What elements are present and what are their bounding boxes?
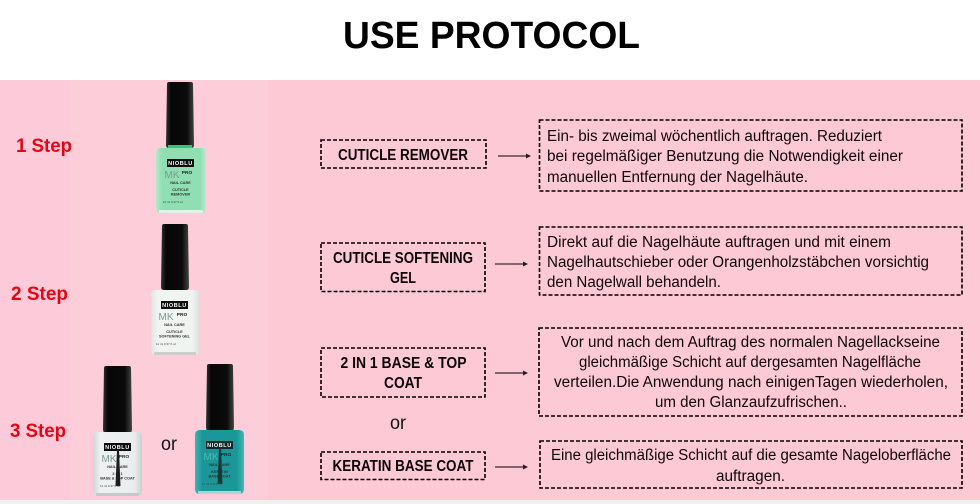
row: cuticle remover [321,120,962,191]
bottle: 2 in 1 base and top coat: 11 ml 0.37 fl.oz [100,484,121,488]
brush [116,450,120,486]
bottle: cuticle softening gel: PRO [177,312,187,318]
description box: base and top coat: Vor und nach dem Auftrag des normalen Nagellackseine [561,334,940,351]
description box: base and top coat [539,328,962,416]
description box: base and top coat: um den Glanzaufzufrischen.. [655,394,847,411]
row: keratin base coat [321,441,962,488]
bottle: cuticle softening gel: CUTICLE [166,330,183,334]
or between labels: or [390,413,407,434]
description box: base and top coat: verteilen.Die Anwendung nach einigenTagen wiederholen, [554,374,948,391]
bottle: 2 in 1 base and top coat: BASE & TOP COAT [100,476,135,480]
step labels [10,136,72,442]
bottle: cuticle softening gel: MK [158,312,174,323]
description box: base and top coat: gleichmäßige Schicht auf dergesamten Nagelfläche [579,354,921,371]
label box: keratin base coat: KERATIN BASE COAT [332,458,474,475]
description box: cuticle remover: Ein- bis zweimal wöchentlich auftragen. Reduziert [547,128,883,145]
bottle: cuticle remover: NAIL CARE [170,181,191,185]
arrow [495,464,528,470]
bottle: cuticle remover: NIOBLU [168,161,193,167]
arrow [498,154,531,158]
bottle: 2 in 1 base and top coat: NIOBLU [105,445,130,451]
bottle: keratin base coat: MK [204,452,219,463]
description box: cuticle softening gel: den Nagelwall behandeln. [547,274,721,291]
bottle: cuticle softening gel: NAIL CARE [164,323,185,327]
bottle: 2 in 1 base and top coat [93,366,142,496]
description box: cuticle remover: manuellen Entfernung der Nagelhäute. [547,169,808,186]
label box: 2 in 1 base and top coat: COAT [384,375,422,392]
bottle: cuticle remover: PRO [182,170,192,176]
label box: cuticle softening gel: GEL [390,270,416,287]
label box: cuticle softening gel [321,243,485,292]
label box: 2 in 1 base and top coat [321,348,485,397]
bottle: keratin base coat: BASE COAT [208,474,231,478]
bottle: keratin base coat: NAIL CARE [209,463,230,467]
title: USE PROTOCOL [343,15,640,57]
description box: keratin base coat [540,441,962,488]
description box: keratin base coat: Eine gleichmäßige Schicht auf die gesamte Nageloberfläche [551,447,951,464]
bottle: cuticle softening gel: 11 ml 0.37 fl.oz [156,342,177,346]
bottle: cuticle remover [156,82,206,213]
step 1 label: 1 Step [16,136,72,157]
bottle: cuticle remover: REMOVER [171,192,190,196]
bottle: cuticle remover: 11 ml 0.37 fl.oz [163,200,184,204]
label box: 2 in 1 base and top coat: 2 IN 1 BASE & TOP [340,355,466,372]
description box: cuticle softening gel: Direkt auf die Nagelhäute auftragen und mit einem [547,234,891,251]
label box: keratin base coat [321,452,485,480]
label box: cuticle remover: CUTICLE REMOVER [338,147,468,164]
arrow [495,262,528,266]
brush [218,448,222,484]
bottle: cuticle softening gel: NIOBLU [162,303,187,309]
description box: keratin base coat: auftragen. [716,468,785,485]
bottle: cuticle remover: CUTICLE [172,188,189,192]
bottle: keratin base coat [195,364,244,494]
bottle: keratin base coat: 11 ml 0.37 fl.oz [202,482,223,486]
bottle: cuticle softening gel: SOFTENING GEL [159,334,191,338]
label box: cuticle softening gel: CUTICLE SOFTENING [333,250,473,267]
bottle: 2 in 1 base and top coat: PRO [119,454,129,460]
arrow [495,370,528,376]
description box: cuticle remover [540,120,962,191]
bottle: 2 in 1 base and top coat: NAIL CARE [107,465,128,469]
label box: cuticle remover [321,140,486,168]
bottle: keratin base coat: PRO [221,452,231,458]
bottle: keratin base coat: NIOBLU [207,443,232,449]
bottle: keratin base coat: KERATIN [211,470,228,474]
bottle: 2 in 1 base and top coat: 2 IN 1 [112,472,123,476]
row: base and top coat [321,328,962,416]
bottle: 2 in 1 base and top coat: MK [102,454,117,465]
or between bottles: or [161,434,178,455]
description box: cuticle softening gel: Nagelhautschieber oder Orangenholzstäbchen vorsichtig [547,254,929,271]
description box: cuticle softening gel [540,227,962,295]
row: cuticle softening gel [321,227,962,295]
step 2 label: 2 Step [11,284,68,305]
bottle: cuticle softening gel [151,224,199,355]
bottle: cuticle remover: MK [164,170,180,181]
description box: cuticle remover: bei regelmäßiger Benutzung die Notwendigkeit einer [547,148,903,165]
step 3 label: 3 Step [10,421,66,442]
